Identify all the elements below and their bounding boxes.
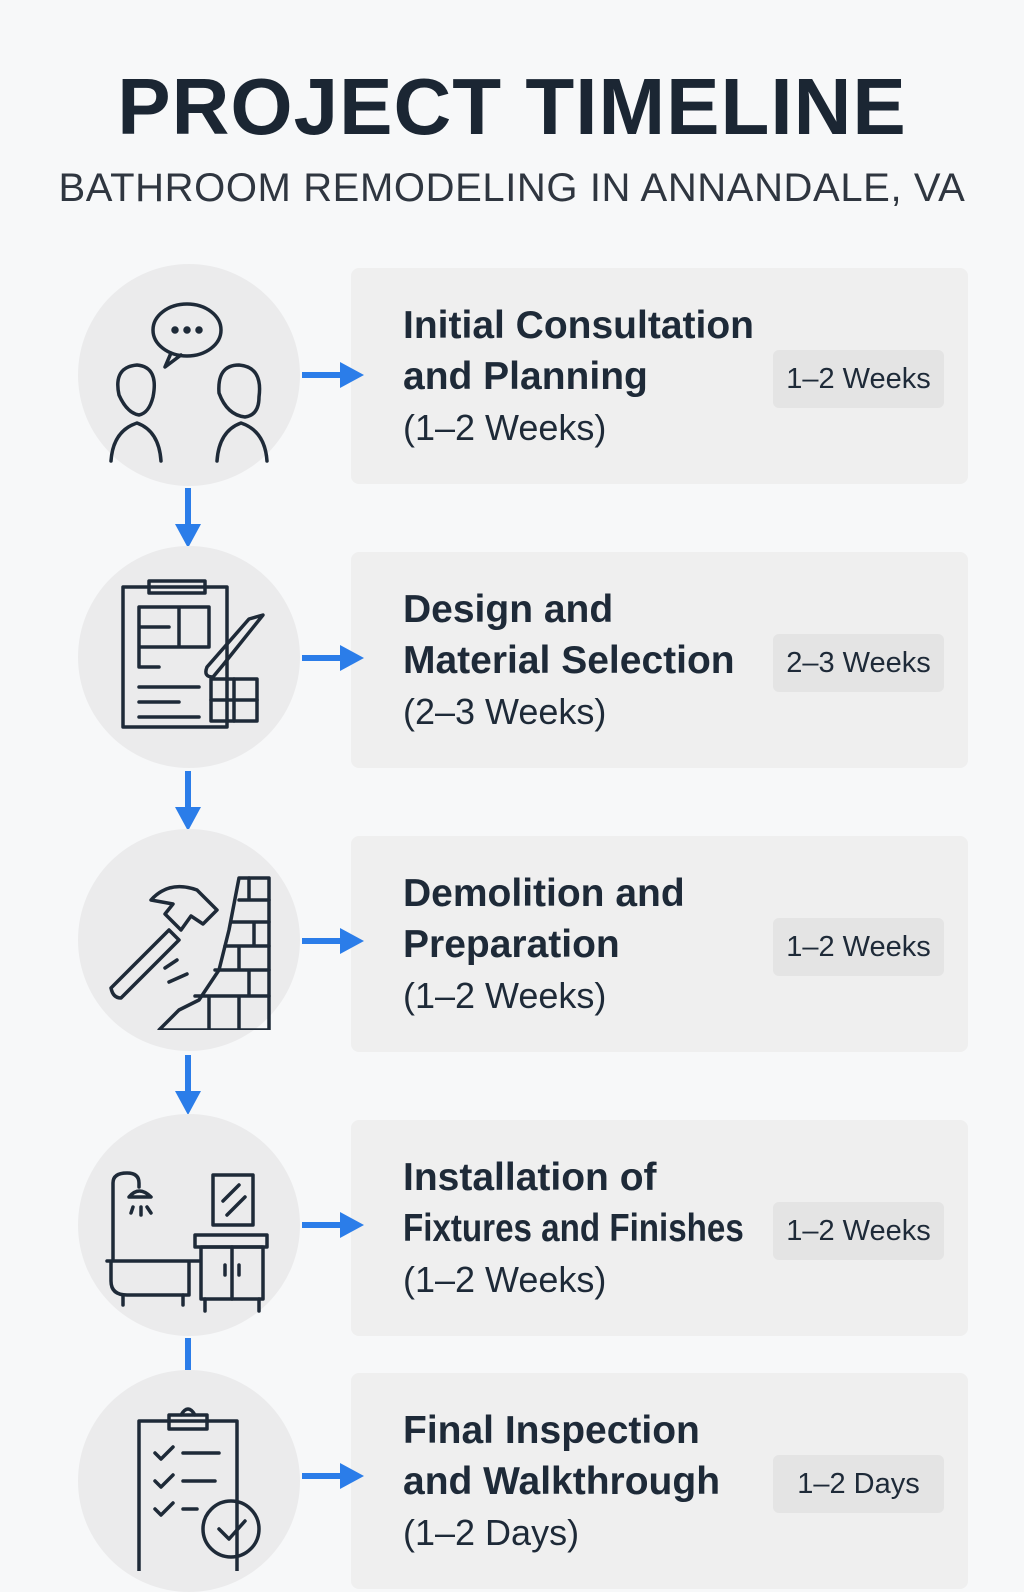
card 3: Demolition and bbox=[403, 872, 685, 915]
subtitle: BATHROOM REMODELING IN ANNANDALE, VA bbox=[59, 166, 965, 210]
card 5: and Walkthrough bbox=[403, 1460, 720, 1503]
badge 5 bbox=[773, 1455, 944, 1513]
icon: fixtures bbox=[78, 1114, 300, 1336]
card 4: (1–2 Weeks) bbox=[403, 1259, 606, 1300]
badge 2: 2–3 Weeks bbox=[786, 647, 931, 679]
arrow down 1 bbox=[175, 488, 201, 546]
title: PROJECT TIMELINE bbox=[117, 62, 907, 151]
card 2 bbox=[351, 552, 968, 768]
card 2: Design and bbox=[403, 588, 613, 631]
card 3: Preparation bbox=[403, 923, 620, 966]
card 3: (1–2 Weeks) bbox=[403, 975, 606, 1016]
badge 5: 1–2 Days bbox=[797, 1468, 920, 1500]
icon: demolition bbox=[78, 829, 300, 1051]
badge 4 bbox=[773, 1202, 944, 1260]
badge 1 bbox=[773, 350, 944, 408]
arrow right 1 bbox=[302, 362, 364, 388]
card 5 bbox=[351, 1373, 968, 1589]
card 2: Material Selection bbox=[403, 639, 735, 682]
card 5: Final Inspection bbox=[403, 1409, 700, 1452]
card 2: (2–3 Weeks) bbox=[403, 691, 606, 732]
arrow right 4 bbox=[302, 1212, 364, 1238]
connector line bbox=[185, 1338, 191, 1370]
card 1: (1–2 Weeks) bbox=[403, 407, 606, 448]
icon: design bbox=[78, 546, 300, 768]
card 3 bbox=[351, 836, 968, 1052]
card 1: and Planning bbox=[403, 355, 648, 398]
card 4 bbox=[351, 1120, 968, 1336]
arrow right 3 bbox=[302, 928, 364, 954]
badge 3: 1–2 Weeks bbox=[786, 931, 931, 963]
icon: inspection bbox=[78, 1370, 300, 1592]
card 5: (1–2 Days) bbox=[403, 1512, 579, 1553]
badge 4: 1–2 Weeks bbox=[786, 1215, 931, 1247]
badge 1: 1–2 Weeks bbox=[786, 363, 931, 395]
badge 2 bbox=[773, 634, 944, 692]
arrow right 2 bbox=[302, 645, 364, 671]
card 4: Installation of bbox=[403, 1156, 656, 1199]
arrow down 3 bbox=[175, 1055, 201, 1114]
icon: consultation bbox=[78, 264, 300, 486]
card 4: Fixtures and Finishes bbox=[403, 1207, 744, 1250]
card 1: Initial Consultation bbox=[403, 304, 754, 347]
arrow down 2 bbox=[175, 771, 201, 830]
arrow right 5 bbox=[302, 1463, 364, 1489]
badge 3 bbox=[773, 918, 944, 976]
card 1 bbox=[351, 268, 968, 484]
